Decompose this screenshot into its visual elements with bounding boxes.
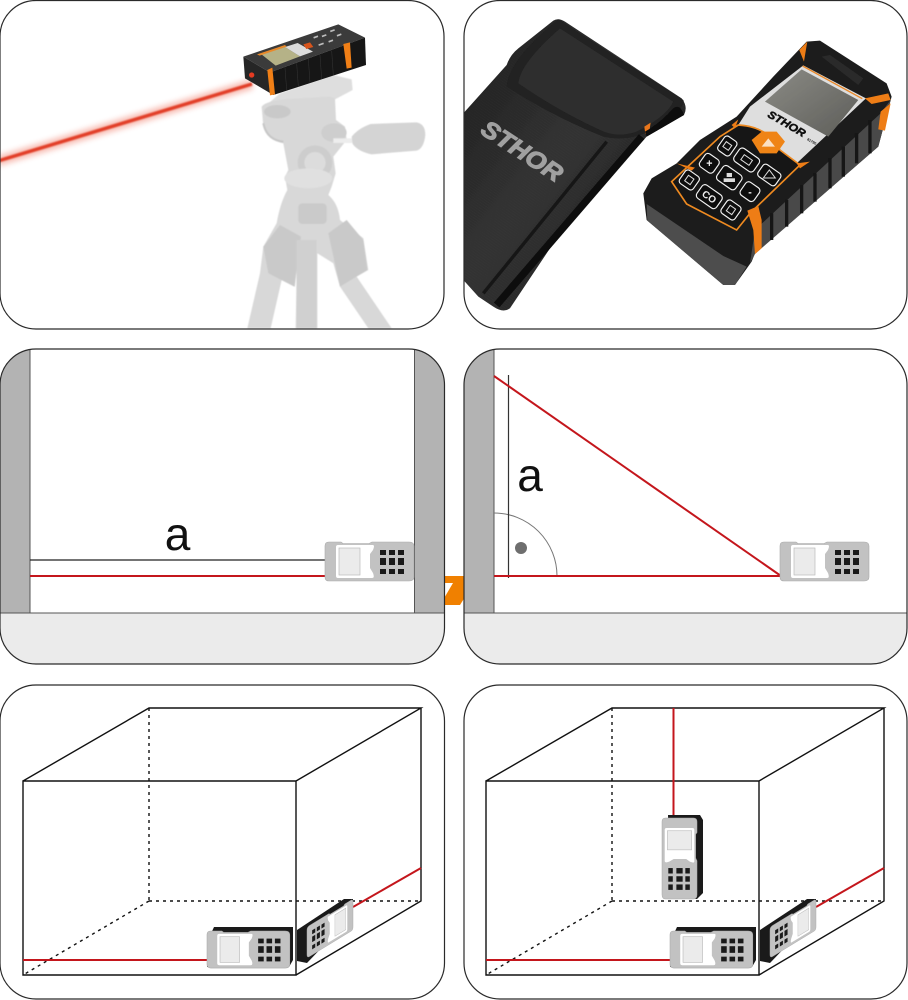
device icon, angled [760, 899, 816, 963]
device icon [325, 542, 414, 581]
carrying case: STHOR [476, 115, 568, 188]
device icon, vertical [662, 815, 703, 899]
carrying case [463, 19, 686, 310]
floor [0, 613, 445, 665]
laser distance meter: + [706, 158, 712, 170]
laser distance meter on tripod [243, 24, 366, 95]
keypad buttons [678, 135, 782, 221]
laser distance meter: - [748, 186, 752, 198]
measure line a [30, 559, 326, 561]
label a: a [517, 449, 543, 501]
device icon [780, 542, 869, 581]
device icon, front [207, 927, 293, 968]
right wall [414, 349, 444, 613]
vertical measure line [508, 375, 510, 578]
laser lines [486, 708, 884, 960]
right angle dot [515, 542, 527, 554]
orange bumpers [677, 42, 891, 254]
device icon, front [670, 927, 756, 968]
tripod and head [247, 75, 425, 328]
left wall [0, 349, 30, 613]
laser beam [0, 84, 252, 161]
laser lines [23, 868, 421, 960]
panel: room measurement, two directions [0, 685, 444, 999]
label a: a [165, 508, 191, 560]
laser distance meter [643, 41, 892, 285]
panel: height by right angle measurement [464, 349, 908, 665]
room box [23, 708, 421, 975]
orange logo fragment between panels [443, 576, 465, 606]
floor [464, 613, 908, 665]
device icon, angled [297, 899, 353, 963]
laser distance meter: 81790 [806, 137, 817, 146]
laser lines [494, 376, 781, 576]
panel: carrying case and device photo [463, 0, 907, 329]
panel: room measurement, three directions [464, 685, 907, 999]
panel: single distance measurement [0, 349, 445, 665]
laser line [30, 575, 326, 577]
wall [464, 349, 494, 613]
laser distance meter: STHOR [765, 109, 808, 140]
laser distance meter: CO [699, 189, 718, 207]
room box [486, 708, 884, 975]
panel: tripod photo with laser [0, 0, 444, 329]
right angle arc [494, 513, 557, 576]
